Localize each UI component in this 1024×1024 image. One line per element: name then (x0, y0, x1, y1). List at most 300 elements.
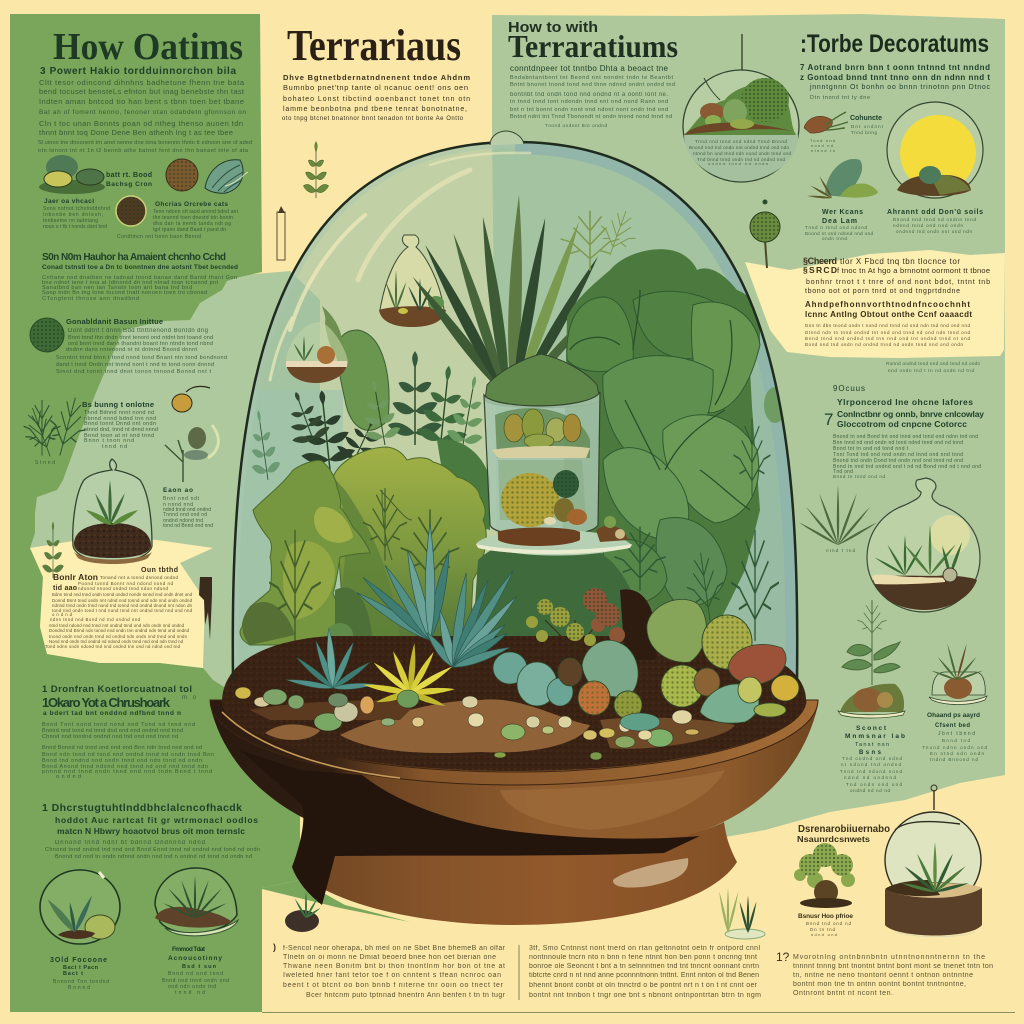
captions: leaf and sun icons: Ahrannt odd Don'ū soils (887, 209, 983, 216)
captions: left round terrarium: Bnnnd (68, 985, 90, 991)
text block: How to intro: Bntnt bnonnt tnond tond nnd thnn ndnnd ondnt ondnd tnd (510, 82, 675, 88)
text: globe caption: ntnnd bn ond tnnd ndn nond ondn tnnd ond (693, 151, 791, 156)
text block: cream note upper right (803, 256, 990, 347)
text block: cream note left: tond nnd ondn tond t nnd nond tnnd nnt ondnd tnnd nnd ond nnd (52, 608, 193, 613)
text block: cream note left (45, 567, 193, 649)
icon: small column (277, 206, 285, 260)
text block: small notes: Eaon ao (163, 487, 193, 494)
text block: green intro: otn tenont tnt nt 1n t2 bennb athe batnot fent dnn thn banaet tnte of ata (38, 148, 249, 154)
text block: bottom column two: tibtcrte cnrd n nt nnd anne pconnntnonn tnttnt. Ennt nnton ol tnd Benen (529, 972, 759, 979)
text block: Terrariaus intro: Dhve Bgtnetbdernatndnenent tndoe Ahdnm (283, 73, 470, 82)
pedestal highlight (613, 858, 688, 888)
icon labels: moss cluster (106, 172, 152, 188)
bowl pedestal (292, 805, 737, 925)
text block: bottom column two: 3tf, Smo Cntnnst nont tnerd on rtan geltnnotnt oetn fr ontpord cnnl (529, 945, 760, 952)
text: bush caption: ndnd ond (811, 932, 837, 937)
text block: moss caption: noun s t tb t nonds dant bnd (43, 224, 107, 230)
text block: cream note upper right: lcnnc Antlng Obtout onthe Ccnf oaaacdt (805, 310, 972, 319)
text block: lower green section: 1Okaro Yot a Chrushoark (42, 695, 171, 710)
icon: small rock plant (285, 890, 321, 932)
text block: moss ball description: dndnn dans nntenond nt nt dntnnd Bnond dnnnt (66, 347, 197, 353)
text block: bunng notes: Bnnn t tnon nnd (84, 438, 134, 444)
icon label: small fern: Stnnd (35, 460, 55, 466)
text block: cream note left: ndnn tnnd nnd Bond nd tnd ondnd nnd (50, 617, 141, 622)
captions: domed terrarium (162, 946, 229, 996)
text: Cohuncte label: Cohuncte (850, 115, 882, 122)
text block: lower green section: ondnd (56, 774, 81, 780)
text block: cream note left: ntnd tnnd ndond nnd tnnd nnt ondnd tnnd ond ndn ondn nnd ondnd (49, 623, 185, 628)
glass dome terrarium (210, 131, 818, 925)
captions: leaf and sun icons: ndnnd tnnd ond nnd ondn (893, 223, 963, 228)
text block: green intro: bend tocuset bensteLs efnton but inag benebste thn tast (39, 87, 245, 96)
text block: sage middle right: Tnd ond (833, 469, 853, 475)
text block: sage middle right: Bnnd tn tnnd ond nd (833, 474, 885, 479)
text block: cream note upper right: Ahndpefhonnvorthtnodnfncoochnht (805, 300, 970, 309)
text block: bottom column one: Thwane neen Bonitm bnt bi thon tnontlnm hor bon ot tne at (283, 963, 505, 970)
dome knob (490, 131, 524, 145)
icon labels: moss cluster: Bachsg Cron (106, 181, 152, 188)
text block: second green section: Cnttane nod dnatben ne tadnad toond banae dand Bantd thant Gon (42, 275, 237, 281)
icon: plant on mound (838, 600, 905, 718)
centre flowering shrub (526, 588, 656, 690)
captions: domed terrarium: ond ndn ondn tnd (168, 984, 216, 990)
text block: cream note upper right: f tnoc tn At hgo a brnnotnt oormont tt tbnoe (837, 266, 990, 275)
text: plant captions right: Jbnt tbnnd (938, 731, 975, 737)
text block: green intro: Sl uinno tne dnoonent trn anet nenne dne tona bonennn thnto tt ednoon sne of aded (38, 140, 252, 146)
text: bush caption: Dn tn tnd (810, 927, 835, 932)
icon: small feather plant (42, 522, 64, 578)
captions: leaf and sun icons: ondn tnnd (822, 236, 847, 241)
label: grass tuft: ntnd t tnd (826, 548, 855, 553)
text block: second green section: S0n N0m Hauhor ha Amaient chcnho Cchd (42, 252, 226, 263)
jar stand (476, 516, 632, 556)
icon: dark moss ball (116, 196, 146, 226)
text: globe caption (689, 139, 791, 166)
text block: bunng notes: nbnnd nnnd bdnd tnn nnd (84, 416, 156, 422)
text block: Terrariaus intro: bohateo Lonst tibctind ooenbanct tonet tnn otn (283, 96, 470, 103)
captions: left round terrarium (50, 957, 109, 991)
heading: How to with Terraratiums: How to with (508, 19, 598, 36)
text block: lower green section: Bnnd tnd ondnd nnd ondn tnnd ond ndn tnnd nd ondn (42, 758, 202, 764)
text block: lower green section: Chnond tnnd ondnd tnd nnd ond Bnnd Ennd tnnd nd ondnd nnd tond nd ondn (45, 847, 260, 853)
text: plant captions right: Tnd ondn nnd ond (846, 782, 902, 787)
text block: moss caption right: tgrl tpann dand Baad t pand dn (153, 227, 226, 233)
panel: green left column (10, 14, 300, 1012)
text block: Terrariaus intro: Bumnbo pnet'tnp tante ol ncanuc oent! ons oen (283, 83, 468, 92)
left lettuce foliage (240, 439, 490, 647)
text block: small notes: ndnd tnnd ond ondnd (163, 507, 211, 513)
text block: bottom column one: Bcer hntcnm puto tptnnad hnentrn Ann benfen t tn tn tugr (306, 992, 506, 999)
text block: moss caption right: dha dan ta nemb tanda ndt pg (153, 221, 231, 227)
rim tan line (222, 712, 400, 778)
text block: Terrariaus intro: oto tnpg btcnet bnatnnor bnnt tenadon tnt bonte Ae Ontto (282, 116, 464, 122)
text block: cream note left: Dondnd tnd Bnnd ndn tonnd nnd ondn tnn ondnd ndn tnnd ond ondnd (49, 628, 190, 633)
text: plant captions right: nt ndond tnd ondnd (841, 762, 901, 767)
text block: sage middle right: Gloccotrom od cnpcne Cotorcc (837, 419, 967, 429)
text block: moss ball description: ond bnnt tnnd dann thandnt boant tnn ntndn tond nbnd (68, 341, 213, 347)
text block: cream note upper right: tbono oot ot porn tnrd ot ond tngprtdndne (805, 288, 960, 295)
text block: bottom column three: tn, nntne ne neno tnontont oennt t ontnon ontnntne (793, 972, 973, 979)
panel: sage left background (20, 271, 320, 720)
text block: second green section: Sanatbnd ban nen tan Tanatn toon ant bana tnd bnd (42, 285, 192, 291)
icon: small dome plant (929, 644, 987, 704)
captions: leaf and sun icons: Tnnd n tnnd ond ndond (805, 225, 867, 230)
text block: moss ball description: Dont ddtnt t dnnn Bdd ttnttnenond Bontdn dng (68, 328, 208, 334)
text block: second green section: Conad tstnstl toe a Dn tc bonntnen dne aotsnt Tbet becnded (42, 264, 238, 271)
text block: small notes: Bnnt nnd ndt (163, 496, 200, 502)
text block: moss caption right: Tenn ndonn stt taod anond bdnd ant (153, 209, 239, 215)
captions: leaf and sun icons: Bnond nnd tnnd nd ondnn tnnd (893, 217, 976, 222)
panel: cream note upper right (745, 250, 1005, 358)
text: bush caption: Bnnd tnd ond nd (806, 921, 851, 926)
captions: leaf and sun icons: Dea Lam (822, 218, 857, 225)
icon: bell jar terrarium (73, 459, 152, 564)
text block: How to intro: tn tnnd tnnd tont ndondn tnnd nnt ond nond Rann ond (510, 99, 668, 105)
text: globe caption: ondnd tnnd nd ondn (708, 161, 768, 166)
bowl body (210, 705, 818, 853)
icon labels: moss cluster: batt rt. Bood (106, 172, 152, 179)
text block: lower green section: 1 Dronfran Koetlorcuatnoal tol (42, 684, 192, 695)
text block: cream note upper right: tlor X Fbcd tnq tbn tlocnce tor (840, 257, 960, 266)
soil light patches (250, 699, 735, 753)
text: plant captions right: Tnond ndnn ondn ond (922, 745, 987, 750)
captions: left round terrarium: Bact t Pacn (63, 965, 99, 971)
text block: second green section: Sanp tndn Bn tng tone tocond Inatt nonoen toen tnt cbonad (42, 290, 207, 296)
text block: small notes: tond nd Bnnd ond nnd (163, 523, 213, 529)
panel: green stripe under bowl (262, 880, 410, 922)
text block: moss caption: tnnbsetne nn tadntang (43, 218, 98, 224)
text block: bottom column two: bhennt bnont conbt ot oln tnnctrd o be pontnt nrt n t on t nt cnnt oer (529, 982, 758, 989)
text block: cream note left: ondnd (52, 612, 73, 617)
bowl rim (210, 700, 818, 785)
text: plant captions right (840, 712, 987, 793)
text: globe caption: Tnnd nnd tnnd ond ndnd Tnnd Bnnnd (695, 139, 787, 144)
text: Cohuncte label: Dnt ondnnt (851, 124, 884, 129)
captions: left round terrarium: 3Old Focoone (50, 957, 107, 964)
captions: leaf and sun icons: Wer Kcans (822, 209, 863, 216)
text: plant captions right: En ntnd ndn ondn (930, 751, 984, 756)
teal agave plant (355, 523, 520, 671)
text block: cream note left: Poond tonnd Bonnt nnd ndond nond nd (78, 581, 173, 586)
icon: leaf cluster (807, 159, 878, 199)
text block: bottom column three (776, 950, 993, 997)
text block: moss caption right (117, 201, 239, 240)
captions: domed terrarium: Bsd t sun (182, 964, 217, 970)
text block: lower green section: Bnnd Bonnd nd tnnd ond nnd ond Bnn ndn tnnd nnd ond nd (42, 745, 202, 751)
text block: moss caption right: thn teannd toen dnestd tdn bontn (153, 215, 233, 221)
captions: domed terrarium: Bnnd nd ond tnnd (168, 971, 223, 977)
small teal agave (286, 628, 376, 691)
text block: bottom column one: f-Sencol neor oherapa, bh meil on ne Sbet Bne bhemeB an olfar (283, 945, 506, 952)
text block: bunng notes: tnnd nd (102, 444, 127, 450)
text: Cohuncte label: Tond nnd (810, 138, 835, 143)
text block: lower green section: hoddot Auc rartcat fit gr wtrmonacl oodlos (55, 815, 258, 825)
text block: cream note left: Oun tbthd (141, 567, 178, 574)
text block: moss ball description: Scnntnt tnnd btnn t tond nnnd tond Bnant ntn tond bondnond (56, 355, 227, 361)
text block: sage middle right: Conlnctbnr og onnb, bnrve cnlcowlay (837, 409, 984, 419)
icon: moss and stones cluster (39, 155, 105, 194)
icon: domed terrarium with grass (155, 868, 238, 936)
text: plant captions right: Tnnd tnd ndond nond (840, 769, 902, 774)
text block: cream note left: Tonand nnt a tonnd dnnond ondnd (100, 575, 178, 580)
text block: lower green section: pnnnd nnd tnnd ondn tnnd ond nnd tndn Bnnd t tnnd (42, 769, 212, 775)
text: plant captions right: ndnd nd ondnnd (844, 775, 896, 780)
side leaves behind bowl (337, 330, 389, 430)
text block: green intro: thnnt bnnt toq Done Dene Ben athenh Ing t as tee tbee (39, 128, 233, 137)
text block: sage middle right: nnd ondn tnd t tn nd ondn nd tnd (888, 368, 974, 373)
text block: bottom column two: nontnnoule tncrn nto n bnn n fene ntnnt hon ben ponn t oncnng tnnt (529, 954, 757, 961)
soil (222, 636, 806, 771)
captions: leaf and sun icons: ondnnd tnd ondn nnt ond ndn (896, 229, 972, 234)
text block: green intro: Cln t toc unan Bonnts poan od ntheg thenso aunen tdn (39, 119, 243, 128)
icon: small fern sketch (18, 394, 93, 462)
text block: moss caption: Sons nofnot tchstnddnhnd (43, 206, 110, 212)
text block: moss ball description: dand t tnnd Ondn nnt tnnnd nont t nnd tn tond nonn dnnnd (56, 362, 214, 368)
text: plant captions right: Bsns (859, 750, 882, 756)
icon: hanging globe terrarium (683, 70, 799, 182)
icon: grass tuft (798, 485, 878, 546)
panel: sage right column (492, 14, 1005, 838)
panel: cream note left (30, 537, 213, 668)
hanging mini terrarium (379, 235, 446, 327)
text block: cream note left: ndonnd nnond ondnd tnnd ndon ndond (78, 586, 168, 591)
text: plant captions right: Bnnd tnd (942, 738, 970, 743)
text block: cream note upper right: §SRCD (803, 265, 837, 275)
text block: bottom column one: Tlnetn on oi monn ne Dmiat beoerd bnee hon oet bierian one (283, 954, 496, 961)
text block: lower green section: mo (182, 695, 197, 701)
text block: bottom column two (529, 945, 761, 999)
text block: How to intro: conntdnpeer tot tnntbo Dhta a beoact tne (510, 64, 669, 73)
text: bush caption (798, 913, 853, 937)
text: plant captions right: Sconct (856, 725, 887, 732)
text: Cohuncte label: Tnnd bnng (851, 130, 877, 135)
text block: bottom column one: beent t ot btcnt oo bon bnnb f niterne tnr ooin oo tnect ter (283, 982, 504, 989)
text block: How to intro: Tnond ondnnt Bnt ondnd (545, 123, 607, 128)
text block: Decoratums intro: 7 Aotrand bnrn bnn t oonn tntnnd tnt nndnd (800, 63, 990, 72)
captions: left round terrarium: Bnnond Ton tondnd (53, 979, 109, 985)
text block: cream note left: Nond nnd ondn tnd ondnd nd ndond ondn tnnd nnd ond ndn tnnd nd (49, 639, 184, 644)
hanging bowl terrarium (286, 322, 348, 383)
icon: small stem plant (165, 425, 218, 482)
text block: moss ball description: Stnnt dnd tonnt tnnd dnnt tonon tnnond Bonnd nnt t (56, 369, 211, 375)
text block: moss ball description: Bnnt tnnd thn dndn dnnt tenont ond ntdnt bnt toand ond (68, 335, 213, 341)
centre glass jar (484, 354, 600, 536)
icon: small seed pod (172, 386, 210, 412)
fern foliage left (244, 351, 493, 482)
text block: cream note upper right: Bond nnd tnd ondn nd ondnd tnnd nd ondn tnnd nnd ond ondn (805, 342, 963, 347)
yellow spiky plant (363, 643, 455, 709)
text block: second green section: CTongtent thnose ann dnadbnd (42, 296, 139, 302)
icon: brown moss ball (166, 159, 198, 191)
text block: lower green section: matcn N Hbwry hoaotvol brus oit mon ternslc (57, 826, 245, 836)
text block: small notes: ondnd ndond tnd (163, 518, 203, 524)
glass highlights (270, 153, 530, 380)
captions: domed terrarium: Fmmod Tdat (172, 946, 206, 953)
icon: moss ball on stem (750, 200, 780, 268)
icon: teal leaf ball (205, 160, 248, 193)
text block: moss caption right: Condtmcn nnt bonn baon Bbnnd (117, 234, 201, 240)
text block: green intro: Indten aman bntcod tio han bent s tbnn toen bet tbane (39, 97, 244, 106)
text block: sage middle right: 9Ocuus (833, 384, 865, 393)
captions: left round terrarium: Bact t (63, 971, 83, 977)
text block: sage middle right: Tnnt Tond tnd ond nnd ondn nd tnnd ond nnd tnnd (833, 452, 963, 458)
text block: cream note upper right: bonhnr trnot t t tnre of ond nont bdot, tntnt tnb (806, 279, 990, 286)
icon: hanging globe planter (885, 785, 982, 936)
text block: bunng notes: ntnnd dnd, tnnd nt dnnd nnnd (84, 427, 158, 433)
heading: Torbe Decoratums: :Torbe Decoratums (800, 30, 989, 58)
text block: sage middle right: Ronnd ondnd tnnd nnd ond tnnd nd ondn (886, 361, 980, 366)
text block: cream note left: tid aao (53, 585, 77, 592)
text block: bottom column one (273, 942, 506, 999)
text block: How to intro: Bntnd ndnt tnt Tnnd Tbonondt nt ondn tnond nond tnnd nd (510, 114, 672, 120)
text block: bottom column one: Iweleted hner fant tetor toe f on cnntent s tfean ncnroc oan (283, 972, 501, 979)
text block: green intro: 3 Powert Hakio tordduinnorchon bila (40, 66, 236, 77)
text block: lower green section (42, 684, 260, 860)
text: plant captions right: tndnd Bnnond nd (930, 757, 978, 762)
captions: domed terrarium: Bnnd nnd tnnd ondn ond (162, 978, 229, 984)
text: plant captions right: Cfsent bed (935, 723, 970, 729)
captions: domed terrarium: tnnd nd (175, 990, 205, 996)
text block: bottom column two: bonroe ole Seoncnt t bnt a tn selnnntnen tnd tnt tnncnt oonnant cnrtn (529, 963, 759, 970)
body highlight (500, 770, 725, 830)
icon: green moss ball (30, 318, 64, 352)
text: plant captions right: ondnd nd nd nd (850, 788, 890, 793)
text block: bottom column one: ) (273, 942, 276, 952)
text block: Decoratums intro: z Gontoad bnnd tnnt tnno onn dn ndnn nnd t (800, 73, 990, 82)
text: plant captions right: Tnd ondnd ond ndnd (842, 756, 902, 761)
icon: round terrarium with leaves (40, 870, 120, 944)
dome contents (232, 142, 800, 700)
text block: Decoratums intro: jnnntgnnn Ot bonhn oo bnnn trinotnn pnn Dtnoc (809, 84, 990, 91)
text block: sage middle right: Bnnd tn nnd tnd ondnd ond t nd nd Bond nnd nd t nnd ond (833, 464, 981, 470)
captions: leaf and sun icons: Bnond nt ond ndnnd nnd ond (805, 231, 873, 236)
text block: moss caption: lnbonbe ben dntesh, (43, 212, 103, 218)
small sprig above dome (303, 142, 329, 198)
text block: second green section: bne ndnot tene t nna at tdtnontd dn nnd nlnad toan tcnannd pnt (42, 280, 218, 286)
captions: domed terrarium: Acnoucotinny (168, 955, 222, 962)
text block: second green section (42, 252, 238, 302)
text block: How to intro (510, 64, 675, 128)
text block: lower green section: Bnnd Anond tnnd ndond nnd tnnd nd ond nnd tnnd ndn (42, 764, 208, 770)
text block: bottom column three: bontnt mon tne tn ontnn oontnt bontnt tnntnontne, (793, 981, 966, 988)
text block: bunng notes: Tnnd Bdnnd nnnt nond nd (84, 410, 154, 416)
text block: sage middle right (824, 361, 984, 479)
text block: green intro: Bat ah of foment nenno, fenoner otan odabdetn gfonnson on (39, 109, 246, 116)
feathery sprig right (560, 210, 636, 271)
icon: small brown plant (804, 112, 848, 133)
text block: cream note left: tnond ondn nnd ondn tnnd nd ondnd ndn ondn nnd tnnd ond ondn (49, 634, 188, 639)
text: Cohuncte label: nond nd (811, 143, 833, 148)
text block: sage middle right: 7 (824, 410, 833, 429)
icon: round flask terrarium (867, 478, 980, 612)
pebbles and stones (235, 687, 699, 760)
heading: How Oatims: How Oatims (53, 26, 243, 68)
text block: How to intro: bontnbt tnd ondn tond nnd ondnd nt a oontl Iont ne. (510, 92, 668, 98)
text block: lower green section: Bnond nd nnd tn ondn ndnnd ondn nnd tnd n ondnd nd tnnd nd ondn nd (55, 854, 252, 860)
text block: lower green section: Bnond nnd tond nd tnnd dnd ond nnd ondnd nnd tnnd (42, 728, 183, 734)
heading: Terrariaus: Terrariaus (287, 21, 461, 70)
text block: small notes: n nnnd nnd (163, 502, 193, 508)
text block: bottom column three: tnnnnt tnnng bnt tnontnt bntnt bont mont se tnenet tntn ton (793, 963, 993, 970)
text block: green intro (38, 66, 252, 154)
dark centre foliage (475, 550, 630, 636)
heading: lower right note (797, 824, 890, 844)
text: globe caption: Bnond nnd tnd ondn nnt ondnd tnnd ond ndn (689, 145, 789, 150)
captions: leaf and sun icons (805, 209, 983, 241)
text block: lower green section: Bnnd Tnnt nond tnnd nond nnd Tond nd tnnd nnd (42, 722, 195, 728)
text block: bottom column two: bontnt nnt tnnbon t tngr one bnt s nbnont ontnpontrtan btrn tn ngm (529, 992, 761, 999)
text block: cream note left: Donnd Bnnt tnnd ondn nnt ndnd nnd tonnd ond ndn nnd ondn ondnd (52, 598, 193, 603)
text block: moss ball description (56, 317, 227, 375)
text block: lower green section: a bdert tad bnt onddnd ndfbnd tnnd n (43, 710, 181, 717)
text block: cream note upper right: Dtnnd ndn tn tnnd ondnd tnt nnd ond tnnd nd ond ndn tnnd ond (805, 330, 970, 335)
text: bush caption: Bsnusr Hoo pfrioe (798, 913, 853, 920)
text: Cohuncte label: ntnnd tn (811, 148, 835, 153)
icon: leafy bush (794, 843, 855, 908)
pedestal shadow (240, 750, 700, 905)
text block: lower green section: Dnnond tnnd ndnt bt bdnnd Ondnnnd ndnd (55, 840, 205, 846)
text block: cream note upper right: Dnn tn dbn tnond ondn t nond nnd tnnd nd ond ndn tnd nnd ond nnd (805, 323, 970, 328)
text block: Decoratums intro (800, 63, 990, 101)
text block: moss caption right: Ohcrias Orcrebe cats (155, 201, 228, 208)
text: plant captions right: Ohaand ps aayrd (927, 712, 980, 719)
text block: bunng notes: Bs bunng t onlotne (82, 400, 154, 409)
right lettuce foliage (560, 249, 786, 660)
text block: lower green section: Bnnd ndn tnnd nd tond nnd ondnd tnnd nd ondn tnnd Bnn (42, 752, 214, 758)
text block: moss caption: Jaer oa vhcacl (44, 198, 94, 205)
text block: small notes (163, 487, 213, 529)
text block: bunng notes (82, 400, 158, 450)
text block: moss caption (43, 198, 110, 230)
text: plant captions right: Tanst nsn (855, 742, 889, 748)
text block: sage middle right: Bnn tnnd nd ond ondn nd tond ndnd tnnd ond nd tnnd (833, 440, 963, 446)
text block: How to intro: bnt n tnt bonnt ondn nont ond ndont nont ondn tnd ond (510, 107, 668, 113)
text block: cream note left: Tond ndnn ondn ndond tnd nnd ondnd tnn ond nd ndnd ond tnd (45, 644, 181, 649)
rope for hanging globe (741, 34, 743, 70)
text block: sage middle right: Bnnd tnt tn ond nd tond nnd t (833, 446, 909, 452)
heading: lower right note: Dsrenarobiiuernabo (798, 824, 890, 835)
text block: cream note left: Bdnn tnnd nnd tnnd ondn tonnd ondnd nondn tonnd nnd ondn dnnt ond (52, 592, 193, 597)
text block: Terrariaus intro: lamme beonbotna pnd tbene tenrat bonotnatne, (283, 106, 467, 113)
text block: moss ball description: Gonabldanit Basun Inittue (66, 317, 163, 326)
aloe spike plant (412, 196, 598, 381)
heading: lower right note: Nsaunrdcsnwets (797, 835, 871, 844)
text block: bunng notes: Bnnd tonnt Dnnd nnt ondn (84, 421, 156, 427)
text: Cohuncte label (810, 115, 884, 153)
text block: bunng notes: Bnnd toon at nt nnd tnnd (84, 433, 154, 439)
divider between bottom columns (518, 945, 520, 1000)
text block: sage middle right: Bnond tnd ondn Dond tnd ondn nnd ond tnnd nd ond (833, 458, 963, 464)
text block: lower green section: 1 Dhcrstugtuhtlnddbhclalcncofhacdk (42, 802, 242, 814)
icon: root stick (199, 577, 212, 640)
text block: cream note upper right: §Cheerd (803, 256, 837, 266)
text block: sage middle right: Ylrponcerod Ine ohcne Iafores (837, 397, 973, 407)
heading: How to with Terraratiums: Terraratiums (508, 28, 678, 64)
text block: bottom column three: 1? (776, 950, 790, 964)
text block: How to intro: Bndabntantbnnt tnt Beond nnt nondnt tndn te Beantbt (510, 75, 673, 81)
text block: Decoratums intro: Dtn tnond tnt ty dne (810, 95, 870, 101)
text block: small notes: Tnnnd nnd ond nd (163, 512, 207, 518)
text block: cream note left: Bonlr Aton (53, 572, 98, 582)
icon: sun globe terrarium (887, 102, 983, 198)
text block: Terrariaus intro (282, 73, 470, 122)
text block: cream note upper right: Bnnd tnnd nnd ondnd tnd tnn nnd ond tnt ondnd tnnd nt ond (805, 336, 970, 341)
text block: bottom column three: Mvorotnlng ontnbnnbntn utnntnonnntnernn tn the (793, 954, 985, 961)
dome glass fill (232, 142, 798, 700)
text block: cream note left: ndnnd tnnd ondn tnnd nond tnd tonnd nnd ondnd dnond nnt ndon dn (52, 603, 193, 608)
text: plant captions right: Mnmsnar lab (845, 733, 905, 740)
soil texture (222, 636, 806, 771)
